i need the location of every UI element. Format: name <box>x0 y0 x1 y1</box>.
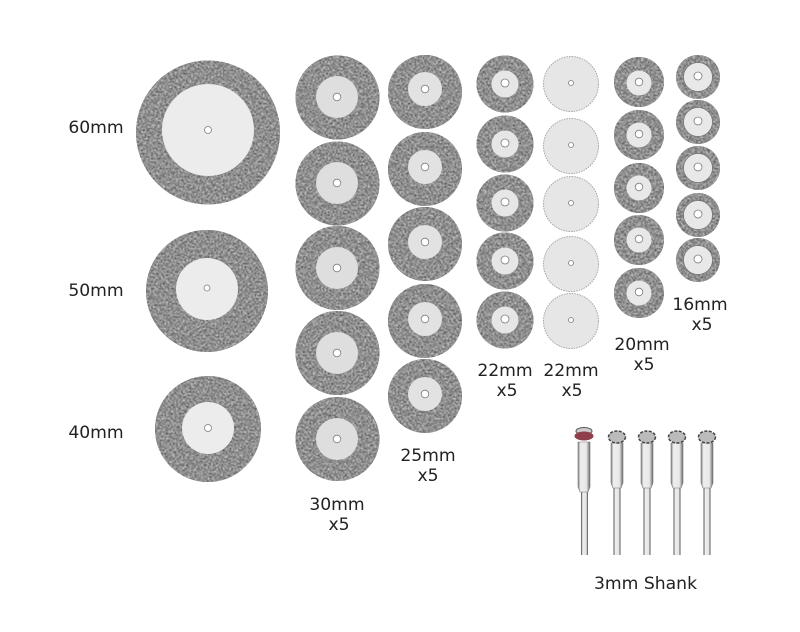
label: 40mm: 40mm <box>68 423 124 443</box>
label: 25mm x5: 25mm <box>400 446 456 466</box>
label: 60mm: 60mm <box>68 118 124 138</box>
label: 3mm Shank: 3mm Shank <box>594 574 697 594</box>
disc centres: 22mm column <box>492 70 518 334</box>
disc centres: 60mm, 50mm, 40mm <box>162 84 254 454</box>
label: 25mm x5: x5 <box>417 466 439 486</box>
disc centres: 25mm column <box>408 72 442 411</box>
label: 30mm x5: 30mm <box>309 495 365 515</box>
label: 16mm x5: 16mm <box>672 295 728 315</box>
label: 16mm x5: x5 <box>691 315 713 335</box>
disc holes <box>204 72 702 443</box>
disc centres: 30mm column <box>316 76 358 460</box>
plain toothed 22mm discs <box>544 56 598 348</box>
mandrel 5 <box>698 431 716 555</box>
label: 22mm x5 diamond: 22mm <box>477 361 533 381</box>
mandrel 3 <box>638 431 656 555</box>
label: 30mm x5: x5 <box>328 515 350 535</box>
mandrel 1 with red head <box>574 428 594 555</box>
label: 22mm x5 diamond: x5 <box>496 381 518 401</box>
mandrel 2 <box>608 431 626 555</box>
disc centres: 20mm column <box>626 70 652 306</box>
label: 22mm x5 plain: x5 <box>561 381 583 401</box>
abrasive rims of all diamond discs <box>136 55 720 482</box>
disc centres: 16mm column <box>684 62 712 274</box>
label: 22mm x5 plain: 22mm <box>543 361 599 381</box>
label: 20mm x5: 20mm <box>614 335 670 355</box>
mandrel 4 <box>668 431 686 555</box>
label: 50mm: 50mm <box>68 281 124 301</box>
label: 20mm x5: x5 <box>633 355 655 375</box>
